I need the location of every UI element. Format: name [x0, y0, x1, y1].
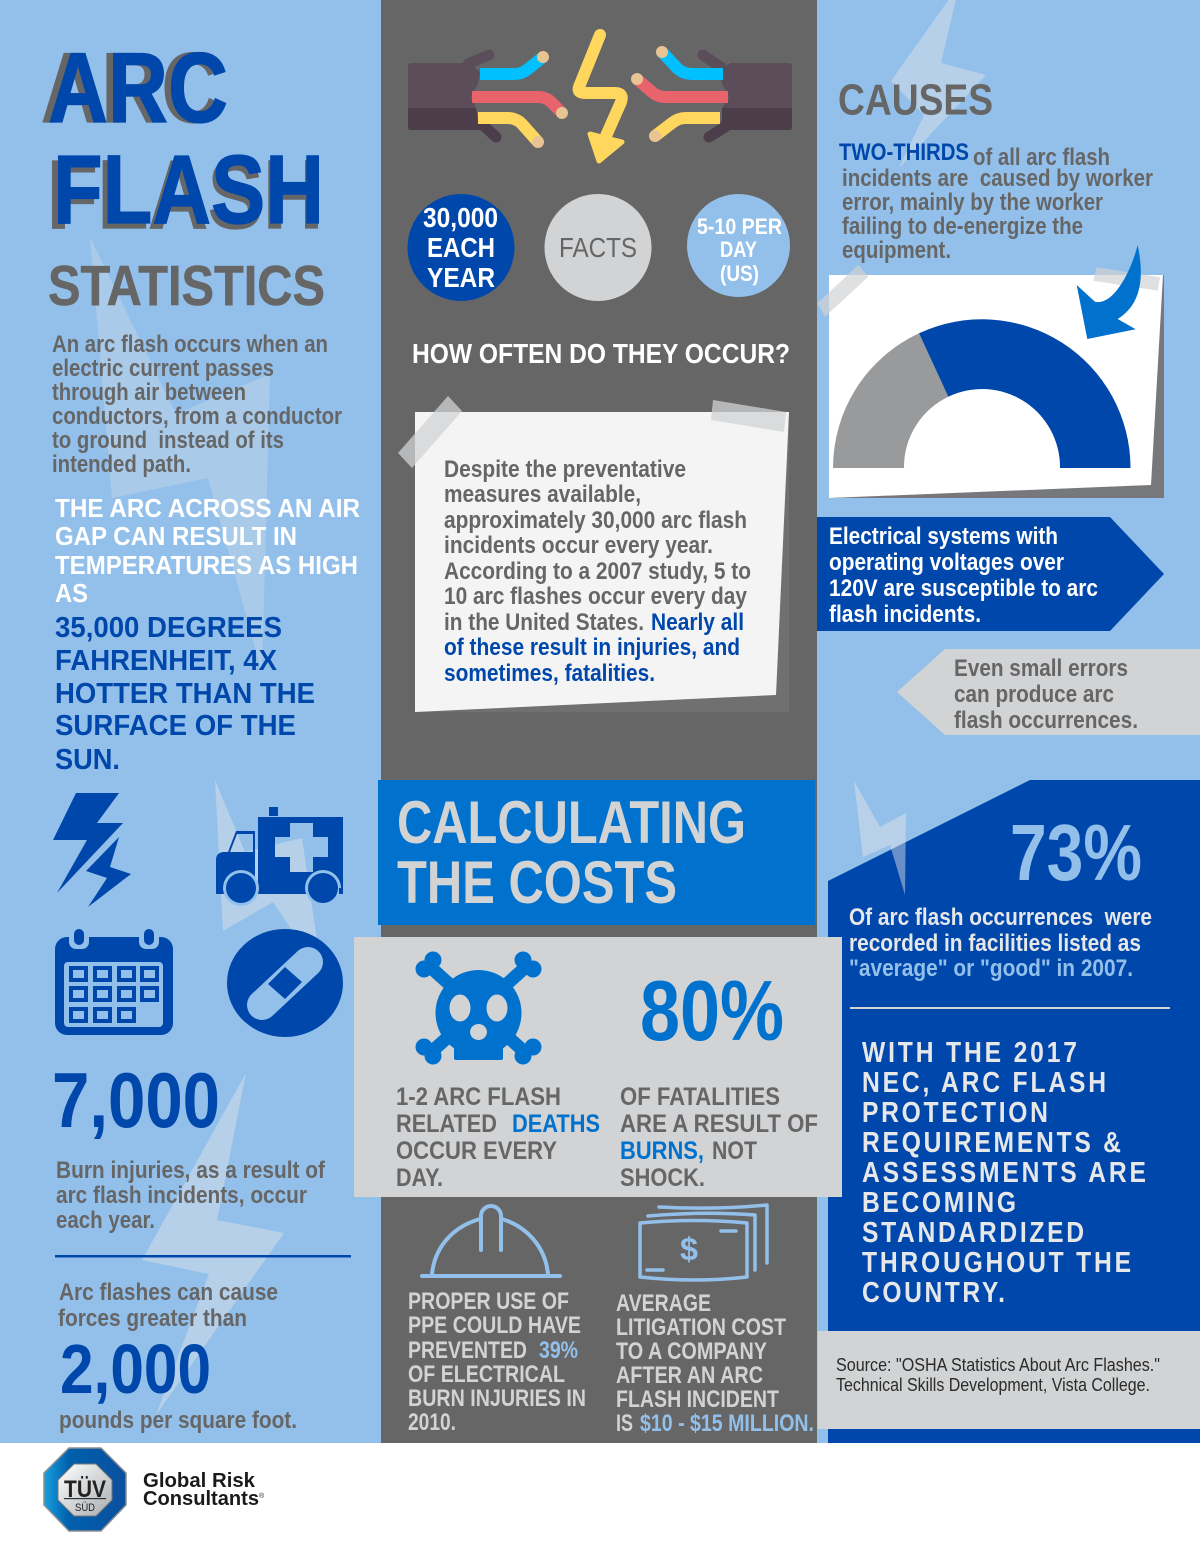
panel: centre grey column: [381, 0, 817, 1443]
stat: 7,000: 7,000: [52, 1056, 220, 1144]
text block: 35,000 degrees: SURFACE OF THE: [55, 710, 296, 742]
text block: fatalities: OF FATALITIES: [620, 1083, 780, 1111]
text block: air gap temperatures: THE ARC ACROSS AN AIR: [55, 493, 360, 523]
text block: PPE: 39%: [539, 1337, 578, 1364]
logo: TUV SUD Global Risk Consultants: Consultants: [143, 1488, 259, 1510]
arrow: curved pointer to chart: [1077, 245, 1141, 339]
callout: small errors arrow: Even small errors: [954, 655, 1128, 682]
text block: forces: forces greater than: [58, 1305, 247, 1332]
stat: 80%: 80%: [640, 964, 784, 1059]
text block: arc flash definition: to ground instead of its: [52, 427, 284, 454]
panel: taped note: [398, 396, 789, 712]
text block: two-thirds: equipment.: [842, 237, 951, 264]
text block: 2017 NEC: NEC, ARC FLASH: [862, 1066, 1106, 1098]
text block: 2017 NEC: [862, 1036, 1146, 1308]
heading: STATISTICS: STATISTICS: [48, 254, 325, 318]
callout: facts: FACTS: [559, 232, 637, 263]
callout: 120V systems arrow: flash incidents.: [829, 601, 981, 628]
logo: TUV SUD Global Risk Consultants: ®: [259, 1492, 265, 1500]
text block: litigation cost: IS: [616, 1410, 633, 1437]
panel: dark blue 73 percent: [828, 780, 1200, 1443]
text block: fatalities: SHOCK.: [620, 1164, 705, 1192]
text block: arc flash definition: through air between: [52, 379, 246, 406]
callout: 30,000 each year: [408, 194, 514, 301]
text block: note body: sometimes, fatalities.: [444, 660, 655, 687]
text block: note body: measures available,: [444, 481, 641, 508]
logo: TUV SUD Global Risk Consultants: [44, 1448, 265, 1531]
callout: small errors arrow: [897, 649, 1200, 735]
text block: 2017 NEC: WITH THE 2017: [862, 1036, 1077, 1068]
text block: facility ratings: [849, 904, 1152, 982]
text block: two-thirds: TWO-THIRDS: [839, 139, 969, 166]
callout: facts: [544, 194, 652, 301]
text block: arc flash definition: electric current passes: [52, 355, 274, 382]
panel: right column causes: [817, 76, 1200, 1443]
callout: 5-10 per day: [687, 194, 790, 297]
panel: centre column facts: [354, 35, 842, 1437]
callout: small errors arrow: can produce arc: [954, 681, 1114, 708]
heading: how often: HOW OFTEN DO THEY OCCUR?: [412, 338, 790, 369]
callout: 30,000 each year: 30,000: [423, 202, 498, 233]
text block: air gap temperatures: AS: [55, 578, 88, 608]
heading: calculating the costs: CALCULATING: [397, 789, 746, 856]
heading: causes: CAUSES: [838, 76, 993, 124]
text block: burn injuries: each year.: [56, 1207, 155, 1234]
callout: small errors arrow: flash occurrences.: [954, 707, 1138, 734]
title: ARC FLASH: FLASH: [47, 140, 323, 249]
text block: note body: incidents occur every year.: [444, 532, 713, 559]
text block: note body: approximately 30,000 arc flash: [444, 507, 747, 534]
title: ARC FLASH: FLASH: [53, 135, 324, 244]
panel: source citation: [818, 1331, 1200, 1429]
text block: litigation cost: TO A COMPANY: [616, 1338, 767, 1365]
icon: calendar: [55, 929, 173, 1035]
text block: 2017 NEC: STANDARDIZED: [862, 1216, 1084, 1248]
panel: source citation: Source: "OSHA Statistics About Arc Flashes.": [836, 1355, 1160, 1375]
text block: note body: According to a 2007 study, 5 to: [444, 558, 751, 585]
text block: deaths: [396, 1083, 600, 1192]
text block: note body: 10 arc flashes occur every day: [444, 583, 748, 610]
icon: double lightning bolt: [53, 793, 131, 907]
text block: deaths: 1-2 ARC FLASH: [396, 1083, 561, 1111]
text block: PPE: [408, 1288, 586, 1436]
callout: 120V systems arrow: Electrical systems with: [829, 523, 1058, 550]
text block: PPE: PREVENTED: [408, 1337, 527, 1364]
text block: deaths: DEATHS: [512, 1110, 600, 1138]
text block: litigation cost: AFTER AN ARC: [616, 1362, 763, 1389]
text block: facility ratings: recorded in facilities listed as: [849, 930, 1141, 957]
text block: PPE: OF ELECTRICAL: [408, 1361, 565, 1388]
text block: PPE: PROPER USE OF: [408, 1288, 569, 1315]
text block: 35,000 degrees: HOTTER THAN THE: [55, 678, 315, 710]
callout: 120V systems arrow: 120V are susceptible to arc: [829, 575, 1098, 602]
text block: litigation cost: $10 - $15 MILLION.: [640, 1410, 814, 1437]
text block: note body: in the United States.: [444, 609, 644, 636]
text block: note body: [444, 456, 751, 687]
callout: 120V systems arrow: operating voltages over: [829, 549, 1064, 576]
text block: burn injuries: [56, 1157, 326, 1234]
text block: fatalities: [620, 1083, 818, 1192]
text block: deaths: DAY.: [396, 1164, 443, 1192]
text block: fatalities: BURNS,: [620, 1137, 704, 1165]
text block: two-thirds: error, mainly by the worker: [842, 189, 1103, 216]
text block: PPE: 2010.: [408, 1409, 456, 1436]
text block: facility ratings: "average" or "good" in 2007.: [849, 955, 1133, 982]
icon: ambulance: [216, 807, 343, 906]
text block: deaths: RELATED: [396, 1110, 497, 1138]
text block: air gap temperatures: [55, 493, 360, 608]
stat: 2,000: 2,000: [60, 1330, 211, 1408]
text block: air gap temperatures: TEMPERATURES AS HIGH: [55, 550, 358, 580]
text block: note body: Despite the preventative: [444, 456, 686, 483]
text block: 2017 NEC: THROUGHOUT THE: [862, 1246, 1131, 1278]
text block: 2017 NEC: ASSESSMENTS ARE: [862, 1156, 1146, 1188]
text block: 2017 NEC: PROTECTION: [862, 1096, 1048, 1128]
logo: TUV SUD Global Risk Consultants: TÜV: [64, 1476, 106, 1503]
panel: left column statistics: [41, 32, 360, 1434]
text block: 35,000 degrees: 35,000 DEGREES: [55, 612, 282, 644]
stat: 73%: 73%: [1010, 808, 1142, 897]
text block: two-thirds: of all arc flash: [973, 144, 1110, 171]
heading: calculating the costs: THE COSTS: [397, 849, 677, 916]
logo: TUV SUD Global Risk Consultants: SÜD: [75, 1502, 95, 1514]
text block: 2017 NEC: BECOMING: [862, 1186, 1016, 1218]
text block: 35,000 degrees: SUN.: [55, 744, 120, 776]
icon: severed cables with lightning bolt: [408, 35, 792, 161]
text block: PPE: PPE COULD HAVE: [408, 1312, 581, 1339]
text block: 35,000 degrees: FAHRENHEIT, 4X: [55, 645, 278, 677]
chart: two-thirds half donut on taped note: [818, 245, 1164, 498]
icon: hard hat: [422, 1206, 560, 1276]
callout: 5-10 per day: 5-10 PER: [697, 214, 782, 239]
callout: 120V systems arrow: [817, 517, 1164, 631]
text block: facility ratings: Of arc flash occurrences were: [849, 904, 1152, 931]
text block: arc flash definition: conductors, from a conductor: [52, 403, 342, 430]
panel: source citation: Technical Skills Development, Vista College.: [836, 1375, 1150, 1395]
text block: air gap temperatures: GAP CAN RESULT IN: [55, 521, 297, 551]
text block: note body: of these result in injuries, and: [444, 634, 740, 661]
title: ARC FLASH: [41, 32, 324, 249]
text block: burn injuries: Burn injuries, as a result of: [56, 1157, 326, 1184]
text block: 35,000 degrees: [55, 612, 315, 776]
title: ARC FLASH: ARC: [48, 32, 228, 143]
icon: stack of money: $: [680, 1231, 698, 1267]
callout: 5-10 per day: (US): [720, 261, 759, 286]
text block: 2017 NEC: REQUIREMENTS &: [862, 1126, 1121, 1158]
text block: litigation cost: LITIGATION COST: [616, 1314, 786, 1341]
icon: skull and crossbones: [416, 952, 542, 1064]
text block: fatalities: ARE A RESULT OF: [620, 1110, 818, 1138]
text block: two-thirds: incidents are caused by worker: [842, 165, 1153, 192]
text block: deaths: OCCUR EVERY: [396, 1137, 557, 1165]
text block: forces: [58, 1279, 278, 1332]
logo: TUV SUD Global Risk Consultants: Global Risk: [143, 1470, 256, 1492]
callout: 30,000 each year: YEAR: [427, 262, 495, 293]
text block: arc flash definition: intended path.: [52, 451, 191, 478]
text block: forces: Arc flashes can cause: [59, 1279, 278, 1306]
text block: note body: Nearly all: [651, 609, 744, 636]
text block: arc flash definition: [52, 331, 342, 478]
watermark: lightning bolts, left column: [90, 0, 986, 1415]
title: ARC FLASH: ARC: [41, 32, 222, 143]
icon: stack of money: [640, 1205, 767, 1280]
heading: calculating the costs: [378, 780, 815, 925]
text block: PPE: BURN INJURIES IN: [408, 1385, 586, 1412]
text block: fatalities: NOT: [712, 1137, 757, 1165]
text block: pounds per square foot: pounds per square foot.: [59, 1407, 297, 1434]
text block: litigation cost: [616, 1290, 814, 1437]
panel: deaths and fatalities band: [354, 937, 842, 1197]
icon: bandage: [227, 929, 343, 1037]
text block: two-thirds: failing to de-energize the: [842, 213, 1083, 240]
text block: two-thirds: [839, 139, 1153, 264]
text block: litigation cost: AVERAGE: [616, 1290, 711, 1317]
callout: 5-10 per day: DAY: [720, 237, 757, 262]
text block: burn injuries: arc flash incidents, occur: [56, 1182, 307, 1209]
callout: 30,000 each year: EACH: [427, 232, 495, 263]
text block: litigation cost: FLASH INCIDENT: [616, 1386, 779, 1413]
text block: 2017 NEC: COUNTRY.: [862, 1276, 1005, 1308]
text block: arc flash definition: An arc flash occurs when an: [52, 331, 328, 358]
